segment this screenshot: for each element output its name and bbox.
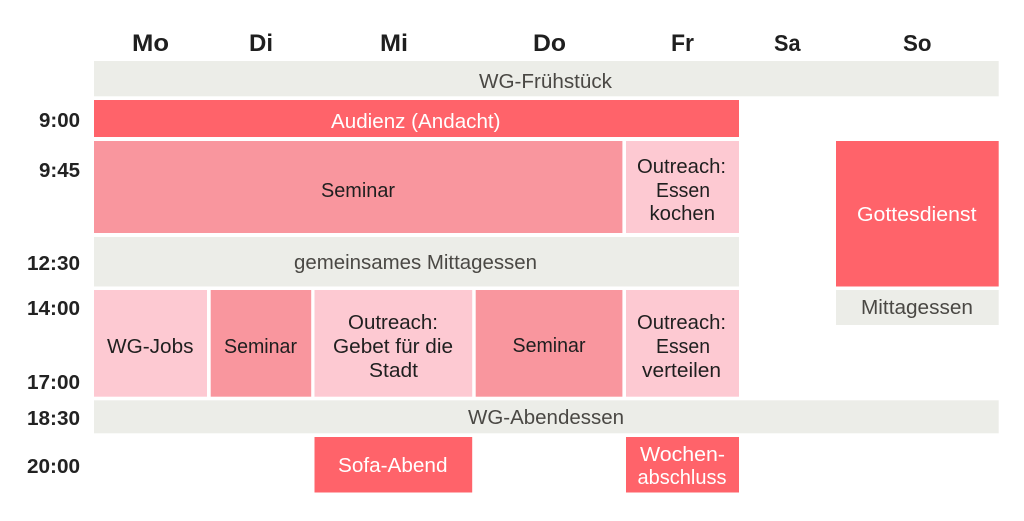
- time labels: 18:30: [27, 408, 80, 430]
- block: Outreach Gebet für die Stadt: [314, 290, 472, 397]
- block: Outreach Essen verteilen: verteilen: [642, 360, 721, 382]
- block: WG-Jobs: [94, 290, 207, 397]
- day headers: Fr: [671, 30, 694, 57]
- block: Outreach Gebet für die Stadt: Stadt: [369, 360, 418, 382]
- block: Outreach Essen kochen: Outreach:: [637, 156, 726, 178]
- block: WG-Frühstück: WG-Frühstück: [479, 71, 613, 93]
- time labels: 14:00: [27, 298, 80, 320]
- block: gemeinsames Mittagessen: gemeinsames Mittagessen: [294, 252, 537, 274]
- block: Audienz (Andacht): Audienz (Andacht): [331, 111, 500, 133]
- block: Mittagessen Sonntag: [836, 290, 999, 325]
- block: Wochenabschluss: abschluss: [638, 467, 726, 489]
- block: Outreach Gebet für die Stadt: Outreach:: [348, 312, 438, 334]
- block: Outreach Essen verteilen: [626, 290, 739, 397]
- day headers: Mo: [132, 30, 169, 57]
- block: gemeinsames Mittagessen: [94, 237, 739, 286]
- block: WG-Jobs: WG-Jobs: [107, 336, 194, 358]
- block: Gottesdienst: Gottesdienst: [857, 204, 977, 226]
- block: Outreach Essen kochen: [626, 141, 739, 233]
- block: WG-Abendessen: WG-Abendessen: [468, 407, 624, 429]
- day headers: Sa: [774, 30, 801, 56]
- block: Wochenabschluss: [626, 437, 739, 492]
- block: Wochenabschluss: Wochen-: [640, 444, 725, 466]
- block: WG-Frühstück: [94, 61, 999, 96]
- day headers: Di: [249, 30, 273, 57]
- block: WG-Abendessen: [94, 400, 999, 433]
- day headers: [132, 30, 932, 57]
- time labels: 9:45: [39, 160, 80, 182]
- time labels: 20:00: [27, 456, 80, 478]
- block: Outreach Essen verteilen: Essen: [656, 336, 710, 358]
- block: Outreach Essen verteilen: Outreach:: [637, 312, 726, 334]
- block: Outreach Essen kochen: kochen: [650, 203, 715, 225]
- block: Seminar Dienstag: Seminar: [224, 336, 297, 358]
- day headers: Mi: [380, 30, 408, 57]
- block: Sofa-Abend: [314, 437, 472, 492]
- time labels: 9:00: [39, 110, 80, 132]
- block: Mittagessen Sonntag: Mittagessen: [861, 297, 973, 319]
- time labels: 12:30: [27, 253, 80, 275]
- block: Audienz (Andacht): [94, 100, 739, 137]
- time labels: 17:00: [27, 372, 80, 394]
- block: Outreach Essen kochen: Essen: [656, 180, 710, 202]
- block: Seminar Dienstag: [211, 290, 311, 397]
- block: Sofa-Abend: Sofa-Abend: [338, 455, 448, 477]
- time labels: [27, 110, 80, 478]
- block: Seminar morning: [94, 141, 622, 233]
- block: Gottesdienst: [836, 141, 999, 286]
- day headers: Do: [533, 30, 566, 57]
- block: Seminar Donnerstag: Seminar: [512, 335, 586, 357]
- block: Seminar morning: Seminar: [321, 180, 395, 202]
- block: Outreach Gebet für die Stadt: Gebet für die: [333, 336, 453, 358]
- day headers: So: [903, 30, 932, 56]
- block: Seminar Donnerstag: [476, 290, 622, 397]
